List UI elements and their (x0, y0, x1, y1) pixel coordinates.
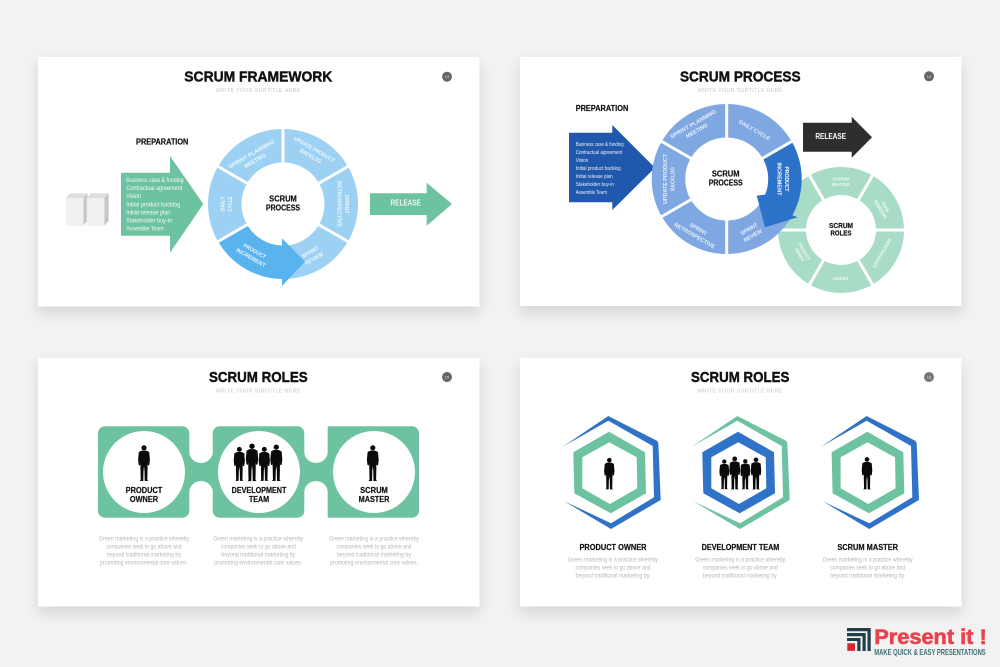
arrow: preparation list: Initial release plan (126, 209, 171, 216)
segment: sprint retrospective: SPRINT (688, 222, 708, 237)
text block: product owner: Green marketing is a practice whereby (568, 556, 659, 563)
arrow: preparation list (569, 125, 655, 210)
segment: scrum master: SCRUM (832, 176, 850, 182)
icon: person (138, 445, 150, 481)
arrow segment: product increment (219, 226, 305, 286)
segment: sprint review: SPRINT (740, 222, 760, 237)
text block: development team: beyond traditional marketing by (221, 551, 296, 558)
arrow: preparation list (121, 156, 203, 253)
connected green blocks (98, 426, 419, 518)
icon: team of four people (234, 444, 282, 481)
icon: team of four people (719, 456, 761, 489)
center label: PROCESS (266, 204, 301, 212)
text block: development team (213, 535, 304, 566)
title: SCRUM PROCESS (680, 68, 801, 85)
segment: daily cycle: CYCLE (228, 196, 234, 212)
segment: sprint planning meeting: SPRINT PLANNING (669, 109, 717, 140)
hexagon: product owner (563, 416, 661, 529)
segment: team members (860, 176, 904, 228)
hexagon: development team (692, 416, 790, 529)
text block: scrum master: Green marketing is a practice whereby (329, 535, 420, 542)
segment: team members: MEMBERS (872, 199, 888, 221)
arrow: preparation list: Assemble Team (126, 226, 164, 232)
arrow segment: product increment: PRODUCT (242, 243, 267, 261)
segment: sprint review (728, 201, 791, 254)
hexagon: scrum master (821, 416, 919, 529)
arrow: preparation list: Business case & funding (576, 142, 624, 148)
page number: 16 (927, 374, 932, 380)
label (126, 486, 162, 504)
heading: preparation: PREPARATION (576, 104, 628, 113)
segment: scrum master (811, 167, 871, 199)
arrow: preparation list: Initial product backlog (126, 201, 181, 208)
arrow: preparation list: Initial product backlog (576, 166, 621, 172)
segment: daily cycle: DAILY (220, 196, 226, 212)
logo: present it (847, 626, 987, 657)
text block: product owner: companies seek to go above and (576, 564, 651, 571)
segment: update product backlog: BACKLOG (671, 167, 677, 191)
title: SCRUM FRAMEWORK (184, 68, 332, 85)
arrow: preparation list: Contractual agreement (126, 185, 183, 192)
text block: product owner (99, 535, 190, 566)
text block: scrum master: Green marketing is a practice whereby (823, 556, 913, 563)
arrow: release: RELEASE (815, 132, 847, 141)
label: MASTER (359, 495, 390, 504)
label: SCRUM (360, 486, 388, 495)
text block: product owner: promoting environmental core values. (100, 559, 188, 566)
segment: users: USERS (834, 276, 849, 282)
heading: preparation: PREPARATION (136, 138, 189, 147)
title: SCRUM ROLES (209, 369, 308, 386)
text block: development team: Green marketing is a practice whereby (695, 556, 786, 563)
label: product owner: PRODUCT OWNER (580, 543, 647, 552)
center label (709, 170, 743, 187)
panel: scrum process (520, 57, 962, 313)
panel: scrum roles hexagons (520, 358, 962, 613)
page number: 15 (445, 374, 450, 380)
segment: sprint review (284, 226, 347, 279)
arrow: preparation list: Contractual agreement (576, 150, 623, 156)
arrow segment: product increment (757, 143, 802, 227)
segment: sprint planning meeting: SPRINT PLANNING (228, 139, 276, 170)
page number: 13 (445, 74, 450, 79)
center label: SCRUM (712, 170, 740, 179)
segment: sprint retrospective: RETROSPECTIVE (336, 181, 342, 227)
text block: product owner (568, 556, 659, 580)
role: development team (218, 431, 300, 513)
icon: person (604, 458, 614, 489)
brand name: Present it ! (874, 626, 987, 649)
role: scrum master (333, 431, 415, 513)
icon: person (862, 457, 872, 489)
segment: update product backlog: UPDATE PRODUCT (663, 153, 669, 204)
segment: update product backlog: BACKLOG (298, 148, 322, 165)
text block: development team: beyond traditional marketing by. (703, 573, 778, 580)
segment: scrum master: MASTER (832, 182, 850, 188)
arrow: release: RELEASE (391, 199, 421, 208)
page number: 14 (927, 74, 932, 79)
subtitle: WRITE YOUR SUBTITLE HERE (698, 388, 783, 394)
text block: product owner: beyond traditional marketing by. (576, 573, 651, 580)
text block: development team: promoting environmental core values. (214, 559, 303, 566)
subtitle: WRITE YOUR SUBTITLE HERE (216, 88, 301, 94)
label: PRODUCT (126, 486, 162, 495)
segment: update product backlog: UPDATE PRODUCT (293, 136, 336, 165)
subtitle: WRITE YOUR SUBTITLE HERE (216, 388, 301, 394)
label (359, 486, 390, 504)
segment: daily cycle (208, 168, 246, 240)
text block: scrum master (329, 535, 420, 566)
center label (266, 194, 301, 212)
arrow: release (370, 183, 452, 226)
text block: product owner: Green marketing is a practice whereby (99, 535, 190, 542)
text block: scrum master: companies seek to go above and (336, 543, 412, 550)
role: product owner (103, 431, 185, 513)
text block: scrum master: companies seek to go above and (830, 564, 906, 571)
text block: development team: companies seek to go above and (703, 564, 778, 571)
segment: daily cycle (728, 104, 791, 157)
text block: scrum master (823, 556, 913, 580)
arrow: preparation list: Business case & funding (126, 177, 184, 184)
arrow: preparation list: Vision (126, 193, 141, 200)
label: development team: DEVELOPMENT TEAM (702, 543, 780, 552)
segment: sprint review: SPRINT (301, 245, 321, 260)
segment: sprint planning meeting: MEETING (685, 123, 709, 140)
center label (829, 223, 853, 237)
segment: stakeholders: STAKEHOLDERS (872, 237, 894, 269)
page number (442, 372, 452, 382)
segment: sprint review: REVIEW (743, 228, 764, 244)
segment: product owner (778, 232, 822, 284)
text block: development team: companies seek to go above and (221, 543, 296, 550)
segment: team members: TEAM (879, 201, 890, 213)
icon: white blocks (66, 193, 109, 226)
label: DEVELOPMENT (232, 486, 286, 495)
segment: update product backlog (284, 129, 347, 182)
center label: ROLES (830, 230, 852, 237)
icon: person (367, 445, 379, 481)
arrow segment: product increment: INCREMENT (235, 247, 267, 269)
center label: SCRUM (829, 223, 853, 230)
segment: sprint planning meeting: MEETING (244, 153, 267, 170)
segment: blank (778, 176, 822, 228)
segment: daily cycle: DAILY CYCLE (738, 120, 771, 142)
arrow: preparation list: Initial release plan (576, 174, 613, 180)
label: TEAM (249, 495, 269, 504)
wheel: scrum process (652, 104, 802, 254)
text block: development team: Green marketing is a practice whereby (213, 535, 304, 542)
icon: logo mark (847, 628, 871, 651)
text block: product owner: beyond traditional marketing by (107, 551, 182, 558)
text block: scrum master: promoting environmental core values. (330, 559, 418, 566)
segment: product owner: PRODUCT (796, 242, 811, 262)
label: scrum master: SCRUM MASTER (837, 543, 898, 552)
page number (442, 72, 452, 82)
wheel: scrum process (208, 129, 358, 286)
segment: sprint retrospective: SPRINT (343, 194, 349, 214)
arrow segment: product increment: PRODUCT (783, 166, 789, 192)
segment: sprint review: REVIEW (304, 251, 325, 267)
segment: sprint retrospective (662, 201, 725, 254)
page number (924, 71, 934, 81)
panel: scrum framework (38, 57, 480, 313)
arrow: preparation list: Stakeholder buy-in (576, 182, 614, 188)
title: SCRUM ROLES (691, 369, 789, 386)
segment: sprint retrospective: RETROSPECTIVE (673, 222, 716, 251)
wheel: scrum roles (778, 167, 904, 293)
subtitle: WRITE YOUR SUBTITLE HERE (698, 88, 783, 94)
segment: update product backlog (652, 143, 690, 215)
text block: product owner: companies seek to go above and (106, 543, 182, 550)
arrow: preparation list: Assemble Team (576, 190, 607, 196)
arrow: release (803, 117, 872, 158)
text block: development team (695, 556, 786, 580)
segment: product owner: OWNER (793, 247, 806, 263)
segment: sprint retrospective (320, 168, 358, 240)
text block: scrum master: beyond traditional marketing by. (830, 573, 905, 580)
center label: SCRUM (269, 194, 297, 204)
panel: scrum roles circles (38, 358, 480, 613)
page number (924, 372, 934, 382)
arrow segment: product increment: INCREMENT (776, 162, 782, 196)
arrow: preparation list: Vision (576, 158, 588, 164)
center label: PROCESS (709, 178, 743, 187)
segment: sprint planning meeting (662, 104, 725, 157)
label: OWNER (130, 495, 158, 504)
label (232, 486, 286, 504)
arrow: preparation list: Stakeholder buy-in (126, 217, 172, 224)
segment: sprint planning meeting (219, 129, 282, 182)
text block: scrum master: beyond traditional marketing by (337, 551, 412, 558)
